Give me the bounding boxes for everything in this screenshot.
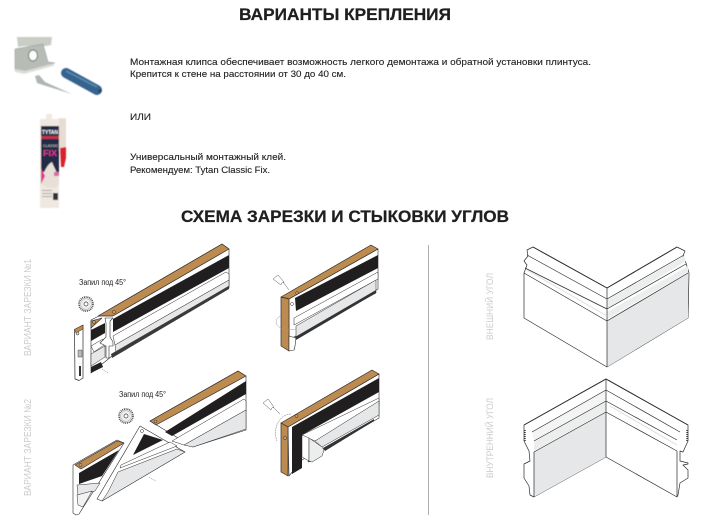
divider <box>428 245 429 515</box>
drawing: variant 1 long profile with slot <box>91 244 229 373</box>
icon: glue nozzle, variant 2 <box>263 399 280 414</box>
arrow: rotation, variant 2 <box>275 414 291 441</box>
label: outer corner: ВНЕШНИЙ УГОЛ <box>484 273 496 340</box>
drawing: inner corner <box>524 379 688 497</box>
caption: 45 degree cut, variant 2: Запил под 45° <box>119 390 166 399</box>
icon: Tytan Classic Fix adhesive tube: FIX <box>43 148 57 158</box>
drawing: variant 2 wedge piece <box>97 426 185 501</box>
text block: adhesive description: Универсальный монтажный клей. <box>130 152 286 163</box>
drawing: variant 2 glued assembled profile <box>281 370 379 476</box>
text: or: ИЛИ <box>130 112 151 123</box>
icon: Tytan Classic Fix adhesive tube: TYTAN <box>42 130 58 136</box>
caption: 45 degree cut, variant 1: Запил под 45° <box>79 278 126 287</box>
icon: glue nozzle, variant 1 <box>273 275 289 290</box>
title: cutting scheme: СХЕМА ЗАРЕЗКИ И СТЫКОВКИ УГЛОВ <box>181 208 509 226</box>
icon: mounting clip with screw and dowel <box>15 37 101 94</box>
drawing: outer corner <box>524 247 689 367</box>
label: cutting variant 2: ВАРИАНТ ЗАРЕЗКИ №2 <box>23 399 34 496</box>
icon: Tytan Classic Fix adhesive tube <box>40 114 66 208</box>
arrow: rotation, variant 1 <box>276 316 296 330</box>
text block: adhesive description: Рекомендуем: Tytan Classic Fix. <box>130 165 270 176</box>
icon: saw blade, variant 2 <box>119 409 133 423</box>
icon: saw blade, variant 1 <box>79 297 93 311</box>
arrow: variant 2 direction <box>149 477 156 481</box>
arrow: variant 1 direction <box>102 369 108 373</box>
label: cutting variant 1: ВАРИАНТ ЗАРЕЗКИ №1 <box>23 259 34 356</box>
drawing: variant 2 left piece <box>73 440 124 515</box>
label: inner corner: ВНУТРЕННИЙ УГОЛ <box>484 398 496 478</box>
drawing: variant 1 cut-off end piece <box>74 325 83 380</box>
text block: clip description: Монтажная клипса обеспечивает возможность легкого демонтажа и обратной установки плинтуса. <box>130 57 591 68</box>
title: mounting options: ВАРИАНТЫ КРЕПЛЕНИЯ <box>239 6 451 24</box>
icon: Tytan Classic Fix adhesive tube: CLASSIC <box>43 144 59 148</box>
text block: clip description: Крепится к стене на расстоянии от 30 до 40 см. <box>130 69 346 80</box>
drawing: variant 1 glued assembled profile <box>281 245 378 351</box>
drawing: variant 2 right piece <box>150 371 246 447</box>
